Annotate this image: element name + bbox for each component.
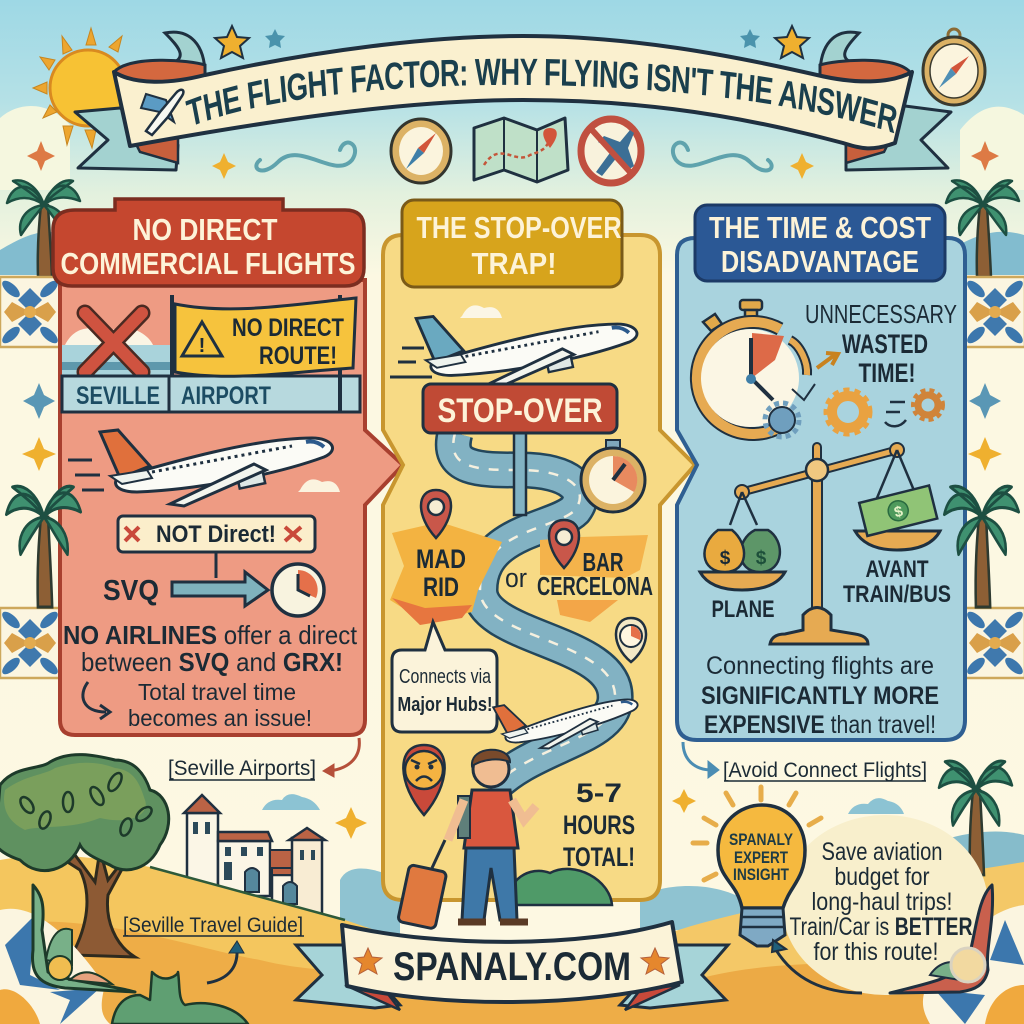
link: seville travel guide: [Seville Travel Guide] bbox=[123, 914, 303, 937]
no airlines text: NO AIRLINES offer a direct bbox=[63, 620, 358, 650]
spanish buildings bbox=[150, 794, 345, 930]
no direct route flag: ROUTE! bbox=[259, 342, 337, 370]
banner curls bbox=[165, 32, 860, 75]
spain map: barcelona: BAR bbox=[582, 547, 624, 577]
svq route diagram: SVQ bbox=[103, 575, 159, 607]
panel heading bbox=[695, 205, 945, 281]
spain map: madrid: MAD bbox=[416, 544, 466, 574]
palm trees over panels bbox=[6, 486, 1019, 607]
connecting flights text: EXPENSIVE than travel! bbox=[704, 711, 936, 739]
link: avoid connect flights: [Avoid Connect Flights] bbox=[723, 759, 927, 782]
winding road bbox=[453, 433, 615, 790]
speech bubble: Major Hubs! bbox=[398, 694, 492, 716]
wasted time text bbox=[805, 299, 957, 388]
plane illustration bbox=[390, 305, 637, 389]
cloud bbox=[848, 798, 904, 814]
airport sign with cross: AIRPORT bbox=[181, 382, 271, 410]
panel heading: NO DIRECT bbox=[132, 212, 278, 247]
icon: banknotes: $ bbox=[892, 503, 905, 521]
link: avoid connect flights bbox=[683, 742, 927, 782]
panel heading bbox=[402, 200, 622, 287]
icon: lightbulb: SPANALY bbox=[729, 830, 794, 849]
icon: money bags: $ bbox=[720, 548, 731, 569]
link: seville airports bbox=[168, 738, 359, 780]
plane illustration bbox=[68, 430, 340, 506]
wasted time text: WASTED bbox=[842, 329, 928, 359]
airport sign with cross bbox=[62, 295, 360, 412]
insight text: budget for bbox=[834, 863, 930, 891]
link: seville airports: [Seville Airports] bbox=[168, 757, 316, 780]
decorative stars bbox=[22, 26, 1002, 839]
total travel time note bbox=[83, 679, 312, 731]
no airlines text bbox=[63, 620, 358, 677]
website banner bbox=[296, 922, 728, 1010]
speech bubble bbox=[392, 622, 497, 732]
spain map: madrid bbox=[390, 490, 502, 625]
icon: money bags bbox=[704, 530, 780, 572]
not direct label: NOT Direct! bbox=[156, 521, 276, 548]
stopwatch illustration bbox=[697, 300, 815, 437]
angry pin icon bbox=[403, 745, 445, 815]
connecting flights text bbox=[701, 652, 939, 739]
balance scale bbox=[700, 443, 940, 644]
website banner: SPANALY.COM bbox=[393, 945, 631, 989]
panel heading: THE STOP-OVER bbox=[416, 210, 622, 245]
insight text bbox=[790, 838, 972, 966]
scale labels: TRAIN/BUS bbox=[843, 581, 951, 608]
five to seven hours text bbox=[563, 778, 635, 872]
no direct route flag bbox=[175, 298, 356, 376]
insight text: for this route! bbox=[814, 938, 938, 966]
banner body bbox=[114, 36, 912, 148]
icon: clock pin bbox=[616, 618, 646, 662]
no airlines text: between SVQ and GRX! bbox=[81, 647, 343, 677]
connecting flights text: Connecting flights are bbox=[706, 652, 934, 680]
insight text: Train/Car is BETTER bbox=[790, 913, 972, 941]
or: or bbox=[505, 563, 527, 593]
heading text: THE FLIGHT FACTOR: WHY FLYING ISN'T THE ANSWER bbox=[185, 58, 896, 134]
icon: banknotes bbox=[859, 486, 937, 536]
panel: time and cost disadvantage bbox=[677, 205, 965, 740]
scale labels bbox=[712, 556, 951, 623]
spain map: barcelona: CERCELONA bbox=[537, 571, 653, 601]
icon: lightbulb bbox=[693, 787, 821, 946]
stopwatch icon bbox=[581, 440, 645, 512]
five to seven hours text: TOTAL! bbox=[563, 842, 635, 872]
panel: the stop-over trap bbox=[383, 200, 695, 929]
panel heading bbox=[53, 199, 364, 286]
stop-over sign bbox=[423, 384, 617, 515]
total travel time note: Total travel time bbox=[138, 679, 296, 705]
connecting flights text: SIGNIFICANTLY MORE bbox=[701, 682, 939, 710]
panel heading: DISADVANTAGE bbox=[721, 244, 919, 279]
panel heading: TRAP! bbox=[472, 246, 556, 281]
svq route diagram bbox=[103, 552, 324, 616]
icon: money bags: $ bbox=[756, 548, 767, 569]
title banner bbox=[73, 30, 953, 172]
olive tree bbox=[0, 755, 169, 957]
icon: map bbox=[474, 118, 568, 182]
icon row under title bbox=[256, 118, 772, 183]
link: seville travel guide bbox=[123, 914, 304, 983]
traveller with suitcase bbox=[398, 750, 536, 929]
insight text: long-haul trips! bbox=[812, 888, 952, 916]
banner tails bbox=[75, 108, 178, 170]
icon: title plane bbox=[141, 90, 183, 135]
five to seven hours text: HOURS bbox=[563, 810, 635, 840]
airport sign with cross: SEVILLE bbox=[76, 382, 160, 410]
speech bubble: Connects via bbox=[399, 666, 492, 688]
not direct label bbox=[118, 516, 315, 552]
spain map: madrid: RID bbox=[423, 572, 459, 602]
five to seven hours text: 5-7 bbox=[576, 778, 622, 808]
no direct route flag: ! bbox=[199, 335, 205, 357]
wasted time text: TIME! bbox=[858, 358, 916, 388]
panel: no direct commercial flights bbox=[53, 199, 403, 735]
icon: sun bbox=[33, 28, 126, 148]
icon: gears bbox=[826, 390, 943, 434]
palm trees and tiles behind panels bbox=[0, 180, 1024, 875]
icon: compass bbox=[391, 119, 451, 183]
expert insight callout bbox=[693, 787, 1024, 1024]
scale labels: PLANE bbox=[712, 596, 774, 623]
icon: lightbulb: INSIGHT bbox=[733, 865, 789, 884]
wasted time text: UNNECESSARY bbox=[805, 299, 957, 329]
corner decoration bbox=[890, 885, 993, 993]
plane on road bbox=[493, 693, 641, 753]
panel heading: THE TIME & COST bbox=[709, 210, 931, 245]
bottom left tile corner and foliage bbox=[0, 885, 248, 1024]
total travel time note: becomes an issue! bbox=[128, 705, 312, 731]
spain map: barcelona bbox=[537, 520, 653, 622]
bottom right tile corner bbox=[923, 905, 1024, 1024]
insight text: Save aviation bbox=[822, 838, 942, 866]
panel heading: COMMERCIAL FLIGHTS bbox=[60, 246, 356, 281]
icon: lightbulb: EXPERT bbox=[734, 848, 788, 867]
icon: compass top right bbox=[923, 29, 985, 105]
bush bbox=[509, 869, 612, 905]
arrow to bulb bbox=[776, 950, 862, 993]
round note background bbox=[782, 815, 988, 995]
stop-over sign: STOP-OVER bbox=[438, 392, 602, 430]
scroll flourishes bbox=[256, 143, 772, 171]
scale labels: AVANT bbox=[866, 556, 929, 583]
icon: no flying bbox=[581, 119, 641, 183]
no direct route flag: NO DIRECT bbox=[232, 314, 344, 342]
